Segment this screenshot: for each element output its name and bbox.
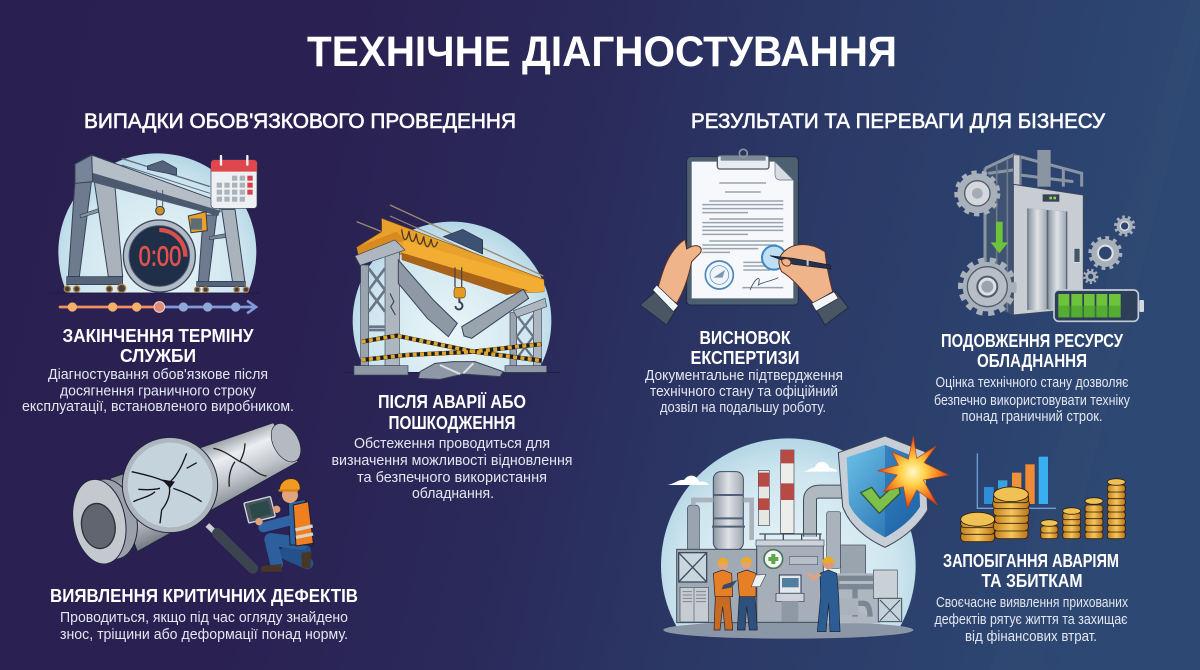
heading: end of service life: ЗАКІНЧЕННЯ ТЕРМІНУ: [62, 326, 254, 346]
icon: gantry crane with timer and calendar: [50, 153, 260, 314]
panel: end of service life: [22, 153, 294, 415]
text: critical defects: Проводиться, якщо під час огляду знайдено: [60, 609, 348, 626]
heading: after accident: ПІСЛЯ АВАРІЇ АБО: [378, 392, 526, 412]
heading: mandatory cases: ВИПАДКИ ОБОВ'ЯЗКОВОГО ПРОВЕДЕННЯ: [84, 110, 516, 133]
panel: expert conclusion: [640, 149, 848, 416]
text: after accident: обладнання.: [412, 485, 494, 502]
title: ТЕХНІЧНЕ ДІАГНОСТУВАННЯ: [307, 28, 897, 76]
heading: critical defects: ВИЯВЛЕННЯ КРИТИЧНИХ ДЕФЕКТІВ: [50, 586, 358, 606]
heading: extended life: ПОДОВЖЕННЯ РЕСУРСУ: [941, 331, 1124, 351]
icon: cracked pipe with magnifier and inspector: [66, 418, 313, 572]
heading: expert conclusion: ЕКСПЕРТИЗИ: [690, 348, 800, 368]
heading: end of service life: [62, 326, 254, 366]
panel: after accident or damage: [332, 205, 572, 502]
heading: expert conclusion: ВИСНОВОК: [700, 328, 791, 348]
text: preventing accidents: [934, 594, 1128, 645]
heading: after accident: [378, 392, 526, 433]
text: extended life: безпечно використовувати техніку: [934, 392, 1130, 409]
text: preventing accidents: Своєчасне виявлення прихованих: [936, 594, 1128, 611]
text: expert conclusion: Документальне підтвердження: [645, 367, 843, 384]
heading: extended life: [941, 331, 1124, 371]
icon: elevator, gears and battery: [957, 150, 1144, 321]
text: after accident: визначення можливості відновлення: [332, 452, 572, 469]
text: expert conclusion: технічного стану та офіційний: [650, 383, 838, 400]
text: extended life: [934, 374, 1130, 425]
icon: industrial plant with workers and shield: [661, 436, 950, 639]
text: extended life: Оцінка технічного стану дозволяє: [936, 374, 1129, 391]
heading: preventing accidents: ЗАПОБІГАННЯ АВАРІЯМ: [943, 551, 1119, 571]
text: after accident: Обстеження проводиться для: [354, 435, 550, 452]
text: critical defects: [60, 609, 348, 643]
panel: preventing accidents and losses: [661, 436, 1128, 644]
text: end of service life: експлуатації, встановленого виробником.: [22, 398, 294, 415]
heading: preventing accidents: [943, 551, 1119, 591]
text: end of service life: досягнення граничного строку: [60, 382, 256, 400]
heading: after accident: ПОШКОДЖЕННЯ: [388, 413, 516, 433]
text: end of service life: Діагностування обов'язкове після: [48, 366, 268, 383]
heading: end of service life: СЛУЖБИ: [120, 346, 196, 366]
text: after accident: [332, 435, 572, 502]
text: preventing accidents: дефектів рятує життя та захищає: [934, 611, 1128, 628]
panel: extended equipment life: [934, 150, 1144, 425]
icon: gantry crane with timer and calendar: 0:00: [139, 241, 181, 272]
heading: expert conclusion: [690, 328, 800, 368]
panel: critical defects: [50, 418, 358, 643]
icon: signed document on clipboard: [640, 149, 848, 325]
text: end of service life: [22, 366, 294, 415]
icon: collapsed overhead crane: [345, 204, 560, 380]
icon: coins and growth chart: [961, 453, 1125, 542]
text: after accident: та безпечного використання: [357, 469, 547, 486]
heading: results and benefits: РЕЗУЛЬТАТИ ТА ПЕРЕВАГИ ДЛЯ БІЗНЕСУ: [691, 110, 1106, 133]
text: extended life: понад граничний строк.: [962, 408, 1102, 425]
text: expert conclusion: дозвіл на подальшу роботу.: [660, 399, 826, 416]
heading: preventing accidents: ТА ЗБИТКАМ: [982, 571, 1082, 591]
text: preventing accidents: від фінансових втрат.: [965, 628, 1097, 645]
heading: extended life: ОБЛАДНАННЯ: [977, 351, 1087, 371]
text: expert conclusion: [645, 367, 843, 416]
text: critical defects: знос, тріщини або деформації понад норму.: [60, 626, 348, 643]
